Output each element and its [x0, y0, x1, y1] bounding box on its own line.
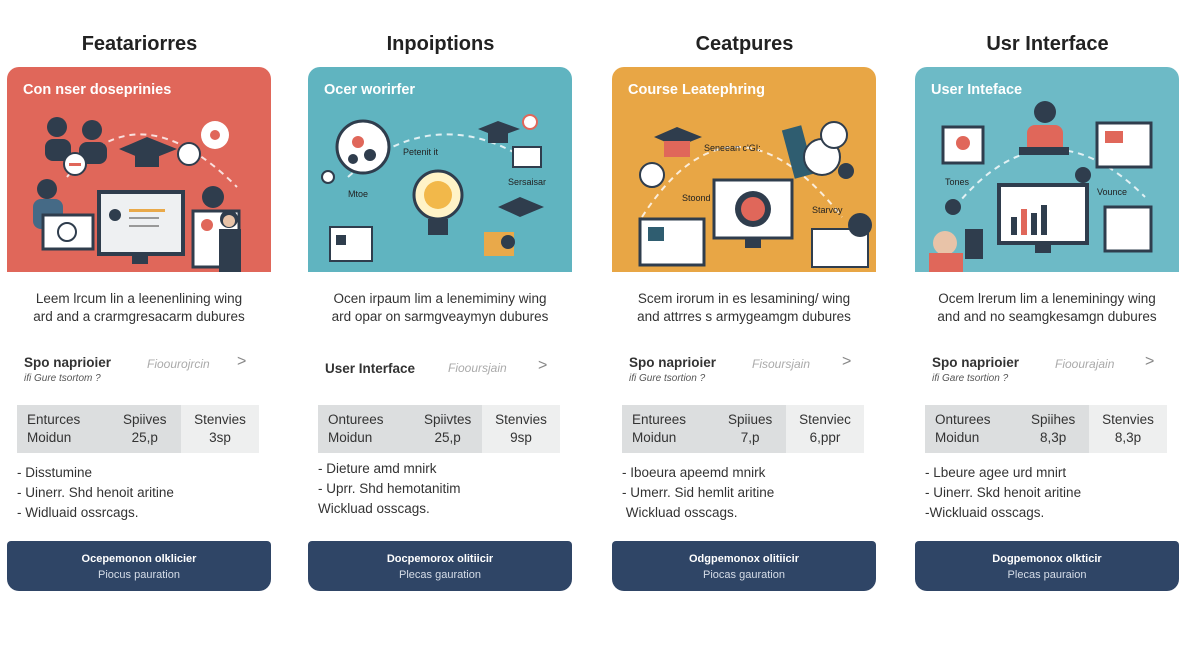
- column 1: [7, 33, 271, 591]
- description: Leem lrcum lin a leenenlining wing: [36, 291, 242, 306]
- table: 3sp: [209, 430, 231, 445]
- table: 8,3p: [1115, 430, 1141, 445]
- row: option: Spo naprioier: [629, 355, 716, 370]
- description: ard and a crarmgresacarm dubures: [33, 309, 245, 324]
- column 3: [612, 33, 876, 591]
- bullet list: Wickluad osscags.: [318, 501, 430, 516]
- bullet list: - Lbeure agee urd mnirt: [925, 465, 1066, 480]
- table: 8,3p: [1040, 430, 1066, 445]
- bullet list: -Wickluaid osscags.: [925, 505, 1044, 520]
- panel: illustration: Tones: [945, 177, 970, 187]
- footer button: Dogpemonox olkticir: [992, 553, 1102, 565]
- table: [925, 405, 1167, 453]
- bullet list: [318, 461, 461, 516]
- panel: illustration: [7, 67, 271, 272]
- table: Moidun: [935, 430, 979, 445]
- description: ard opar on sarmgveaymyn dubures: [332, 309, 548, 324]
- footer button: Plecas pauraion: [1008, 569, 1086, 581]
- table: 7,p: [741, 430, 760, 445]
- table: 6,ppr: [810, 430, 840, 445]
- description: [937, 291, 1157, 324]
- panel: illustration: Vounce: [1097, 187, 1127, 197]
- row: option: >: [538, 357, 547, 374]
- table: Moidun: [632, 430, 676, 445]
- description: [33, 291, 245, 324]
- title: Inpoiptions: [387, 33, 494, 55]
- description: Ocen irpaum lim a lenemiminy wing: [333, 291, 547, 306]
- bullet list: - Uinerr. Skd henoit aritine: [925, 485, 1081, 500]
- description: and attrres s armygeamgm dubures: [637, 309, 851, 324]
- table: Stenvies: [194, 412, 246, 427]
- table: Stenviec: [799, 412, 851, 427]
- footer button: [308, 541, 572, 591]
- panel: illustration: Petenit it: [403, 147, 439, 157]
- row: option: [932, 353, 1154, 384]
- table: [17, 405, 259, 453]
- bullet list: [925, 465, 1081, 520]
- description: Scem irorum in es lesamining/ wing: [638, 291, 850, 306]
- description: and and no seamgkesamgn dubures: [937, 309, 1157, 324]
- row: option: [325, 357, 547, 376]
- bullet list: - Uprr. Shd hemotanitim: [318, 481, 461, 496]
- bullet list: - Widluaid ossrcags.: [17, 505, 139, 520]
- table: Moidun: [328, 430, 372, 445]
- table: Spiives: [123, 412, 167, 427]
- panel heading: User Inteface: [931, 82, 1022, 98]
- row: option: ifi Gare tsortion ?: [932, 373, 1008, 384]
- bullet list: [17, 465, 174, 520]
- footer button: Piocas gauration: [703, 569, 785, 581]
- table: Spiiues: [728, 412, 772, 427]
- table: 25,p: [434, 430, 461, 445]
- row: option: >: [237, 353, 246, 370]
- panel: illustration: Stoond: [682, 193, 711, 203]
- panel: illustration: [308, 67, 572, 272]
- column 2: [308, 33, 572, 591]
- row: option: [24, 353, 246, 384]
- footer button: Docpemorox olitiicir: [387, 553, 493, 565]
- footer button: [7, 541, 271, 591]
- panel: illustration: [915, 67, 1179, 272]
- row: option: Spo naprioier: [932, 355, 1019, 370]
- bullet list: - Iboeura apeemd mnirk: [622, 465, 765, 480]
- footer button: [612, 541, 876, 591]
- table: Onturees: [328, 412, 384, 427]
- title: Usr Interface: [986, 33, 1109, 55]
- table: Moidun: [27, 430, 71, 445]
- table: 25,p: [132, 430, 158, 445]
- panel heading: Course Leatephring: [628, 82, 765, 98]
- row: option: ifi Gure tsortion ?: [629, 373, 705, 384]
- panel: illustration: [612, 67, 876, 272]
- row: option: Fisoursjain: [752, 357, 810, 371]
- panel: illustration: Mtoe: [348, 189, 368, 199]
- footer button: Ocepemonon olklicier: [82, 553, 196, 565]
- table: Onturees: [935, 412, 991, 427]
- row: option: Fioourojrcin: [147, 357, 210, 371]
- row: option: >: [1145, 353, 1154, 370]
- title: Featariorres: [82, 33, 197, 55]
- row: option: Fioourajain: [1055, 357, 1114, 371]
- table: Stenvies: [495, 412, 547, 427]
- table: Enturees: [632, 412, 686, 427]
- table: [622, 405, 864, 453]
- bullet list: [622, 465, 774, 520]
- footer button: Plecas gauration: [399, 569, 481, 581]
- footer button: [915, 541, 1179, 591]
- footer button: Odgpemonox olitiicir: [689, 553, 799, 565]
- table: [318, 405, 560, 453]
- title: Ceatpures: [696, 33, 793, 55]
- panel: illustration: Sersaisar: [508, 177, 546, 187]
- column 4: [915, 33, 1179, 591]
- row: option: Spo naprioier: [24, 355, 111, 370]
- description: [637, 291, 851, 324]
- table: Enturces: [27, 412, 80, 427]
- panel heading: Con nser doseprinies: [23, 82, 171, 98]
- row: option: >: [842, 353, 851, 370]
- row: option: ifi Gure tsortom ?: [24, 373, 101, 384]
- table: Spiihes: [1031, 412, 1075, 427]
- footer button: Piocus pauration: [98, 569, 180, 581]
- bullet list: - Uinerr. Shd henoit aritine: [17, 485, 174, 500]
- table: 9sp: [510, 430, 532, 445]
- table: Spiivtes: [424, 412, 471, 427]
- bullet list: Wickluad osscags.: [626, 505, 738, 520]
- bullet list: - Dieture amd mnirk: [318, 461, 437, 476]
- description: Ocem lrerum lim a leneminingy wing: [938, 291, 1156, 306]
- row: option: User Interface: [325, 361, 415, 376]
- bullet list: - Disstumine: [17, 465, 92, 480]
- row: option: Fiooursjain: [448, 361, 507, 375]
- bullet list: - Umerr. Sid hemlit aritine: [622, 485, 774, 500]
- description: [332, 291, 548, 324]
- row: option: [629, 353, 851, 384]
- table: Stenvies: [1102, 412, 1154, 427]
- panel: illustration: Seneean c'GI:: [704, 143, 761, 153]
- panel: illustration: Starvoy: [812, 205, 843, 215]
- panel heading: Ocer worirfer: [324, 82, 415, 98]
